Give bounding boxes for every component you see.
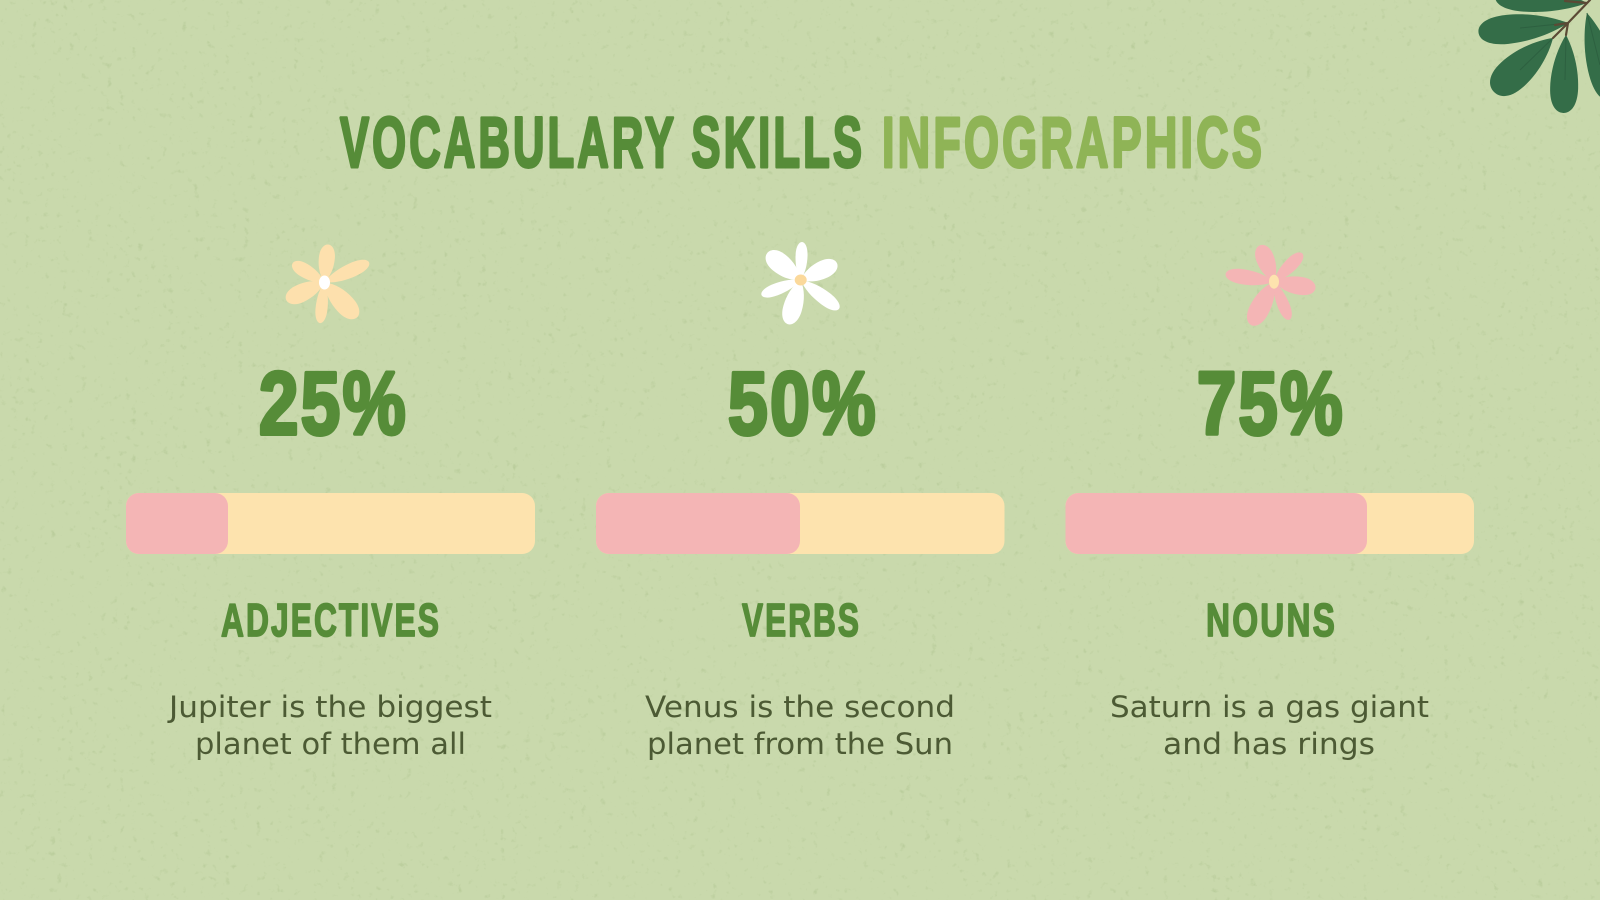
panel: adjectives — [126, 244, 535, 761]
description: nouns: Saturn is a gas giant — [1110, 690, 1429, 724]
description: adjectives — [167, 690, 492, 761]
title: VOCABULARY SKILLS — [340, 104, 865, 183]
icon: pink flower — [1224, 242, 1317, 330]
panel: nouns — [1066, 242, 1474, 761]
description: verbs: Venus is the second — [645, 690, 955, 724]
description: adjectives: planet of them all — [195, 727, 466, 761]
description: nouns — [1110, 690, 1429, 761]
heading: verbs: VERBS — [742, 594, 861, 646]
heading: nouns: NOUNS — [1206, 594, 1337, 646]
description: adjectives: Jupiter is the biggest — [167, 690, 492, 724]
title: INFOGRAPHICS — [882, 104, 1265, 183]
description: verbs — [645, 690, 955, 761]
panel: verbs — [596, 242, 1004, 761]
icon: corner leaves — [1477, 0, 1600, 113]
progress bar 50% — [596, 493, 1004, 554]
icon: cream flower — [282, 244, 372, 324]
percentage 75%: 75% — [1197, 353, 1345, 453]
progress bar 25% — [126, 493, 535, 554]
description: nouns: and has rings — [1163, 727, 1375, 761]
progress bar 75% — [1066, 493, 1474, 554]
icon: white flower — [759, 242, 843, 327]
percentage 50%: 50% — [728, 353, 878, 453]
description: verbs: planet from the Sun — [647, 727, 953, 761]
heading: adjectives: ADJECTIVES — [221, 594, 441, 646]
percentage 25%: 25% — [259, 353, 408, 453]
